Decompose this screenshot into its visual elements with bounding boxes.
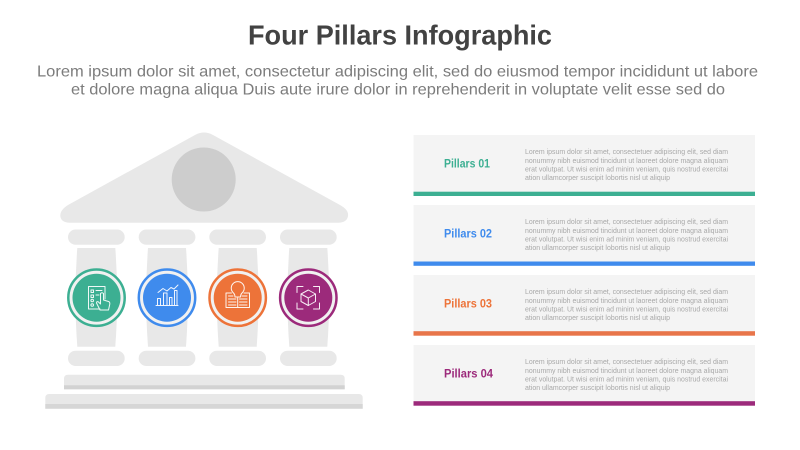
lower step (45, 394, 363, 409)
label: pillars 03: Pillars 03 (444, 296, 492, 310)
column shafts (75, 248, 329, 347)
body text: pillars 01: erat volutpat. Ut wisi enim ad minim veniam, quis nostrud exercitai (525, 164, 728, 174)
body text: pillars 02: erat volutpat. Ut wisi enim ad minim veniam, quis nostrud exercitai (525, 234, 728, 244)
body text: pillars 03: erat volutpat. Ut wisi enim ad minim veniam, quis nostrud exercitai (525, 304, 728, 314)
column capitals (68, 230, 337, 245)
body text: pillars 01: Lorem ipsum dolor sit amet, consectetuer adipiscing elit, sed diam (525, 147, 728, 156)
body text: pillars 03 (525, 287, 728, 322)
panel: pillars 04 (414, 345, 755, 406)
icon: cube in scan frame (297, 286, 320, 309)
title: Four Pillars Infographic (248, 20, 552, 50)
body text: pillars 01: nonummy nibh euismod tincidunt ut laoreet dolore magna aliquam (525, 156, 728, 165)
body text: pillars 02: ation ullamcorper suscipit lobortis nisl ut aliquip (525, 243, 670, 252)
body text: pillars 04: nonummy nibh euismod tincidunt ut laoreet dolore magna aliquam (525, 366, 728, 375)
label: pillars 02: Pillars 02 (444, 226, 492, 240)
icon: open book with lightbulb (226, 282, 250, 308)
temple roof (60, 132, 348, 223)
icon badge: pillar 3 book and bulb (210, 270, 266, 326)
body text: pillars 03: nonummy nibh euismod tincidunt ut laoreet dolore magna aliquam (525, 296, 728, 305)
body text: pillars 04: ation ullamcorper suscipit lobortis nisl ut aliquip (525, 383, 670, 392)
temple illustration (45, 132, 363, 409)
body text: pillars 02: nonummy nibh euismod tincidunt ut laoreet dolore magna aliquam (525, 226, 728, 235)
body text: pillars 04: Lorem ipsum dolor sit amet, consectetuer adipiscing elit, sed diam (525, 357, 728, 366)
column bases (68, 351, 337, 366)
body text: pillars 03: Lorem ipsum dolor sit amet, consectetuer adipiscing elit, sed diam (525, 287, 728, 296)
label: pillars 01: Pillars 01 (444, 156, 490, 170)
subtitle text: et dolore magna aliqua Duis aute irure dolor in reprehenderit in voluptate velit esse sed do (71, 81, 725, 98)
icon badge: pillar 1 checklist (68, 270, 125, 326)
panel: pillars 01 (414, 135, 755, 196)
icon: checklist with hand (88, 286, 110, 310)
icon badge: pillar 4 3D cube (280, 270, 336, 326)
body text: pillars 02: Lorem ipsum dolor sit amet, consectetuer adipiscing elit, sed diam (525, 217, 728, 226)
icon badge: pillar 2 bar chart (139, 270, 195, 326)
body text: pillars 04 (525, 357, 728, 392)
subtitle text (37, 64, 758, 98)
body text: pillars 03: ation ullamcorper suscipit lobortis nisl ut aliquip (525, 313, 670, 322)
roof circle (172, 148, 236, 212)
upper step (64, 375, 345, 389)
body text: pillars 01: ation ullamcorper suscipit lobortis nisl ut aliquip (525, 173, 670, 182)
icon: growth chart (156, 285, 178, 306)
panel: pillars 03 (414, 275, 755, 336)
subtitle text: Lorem ipsum dolor sit amet, consectetur adipiscing elit, sed do eiusmod tempor incididunt ut labore (37, 64, 758, 81)
label: pillars 04: Pillars 04 (444, 366, 493, 380)
panel: pillars 02 (414, 205, 755, 266)
body text: pillars 02 (525, 217, 728, 252)
body text: pillars 04: erat volutpat. Ut wisi enim ad minim veniam, quis nostrud exercitai (525, 374, 728, 384)
body text: pillars 01 (525, 147, 728, 182)
